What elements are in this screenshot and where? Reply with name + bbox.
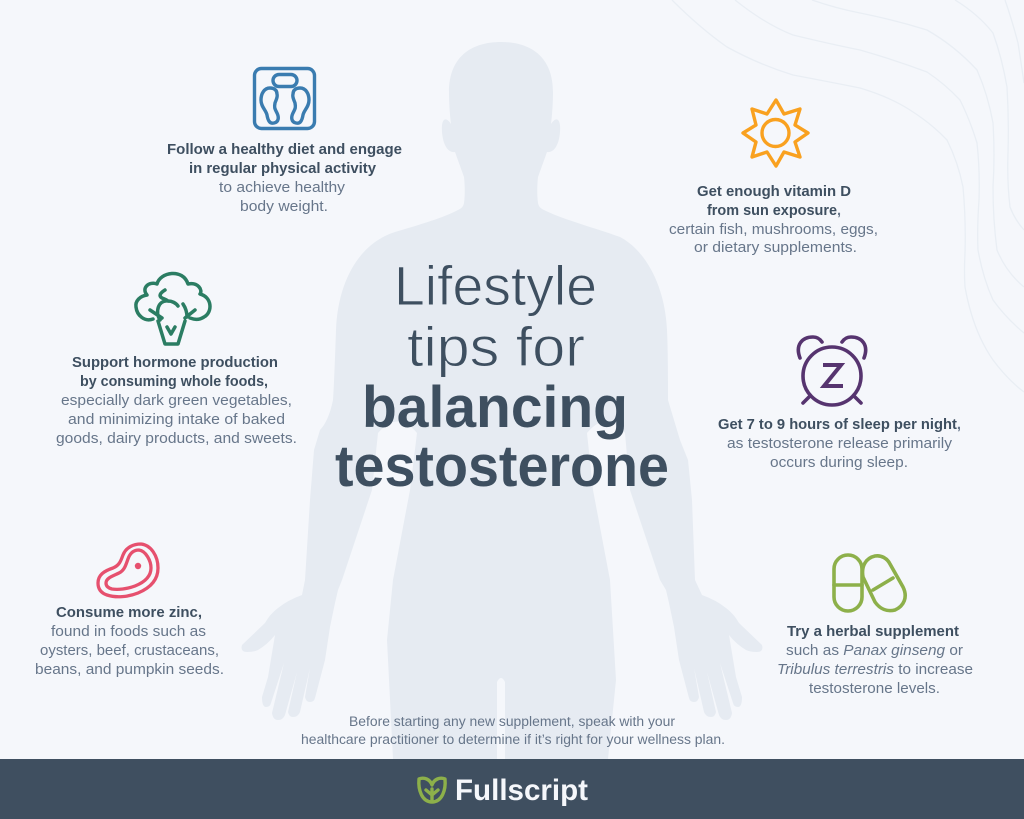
icon: meat steak: [98, 544, 158, 597]
disclaimer: healthcare practitioner to determine if it’s right for your wellness plan.: [301, 732, 725, 747]
text: sleep: as testosterone release primarily: [727, 436, 953, 452]
text: healthy body weight: Follow a healthy diet and engage: [167, 142, 402, 158]
text: vitamin D: Get enough vitamin D: [697, 184, 851, 200]
text: whole foods: especially dark green vegetables,: [61, 393, 292, 409]
icon: capsules: [834, 555, 905, 611]
title: balancing: [362, 375, 628, 440]
text: whole foods: [56, 355, 297, 447]
text: zinc: found in foods such as: [51, 624, 206, 640]
text: zinc: [35, 605, 224, 678]
title: Lifestyle: [394, 254, 597, 317]
title: [335, 254, 669, 499]
text: sleep: Get 7 to 9 hours of sleep per night ,: [718, 417, 961, 433]
text: whole foods: by consuming whole foods,: [80, 374, 268, 390]
footer bar: [0, 759, 1024, 819]
panel: zinc: [35, 544, 224, 678]
human body silhouette: [242, 42, 762, 759]
text: vitamin D: or dietary supplements.: [694, 240, 857, 256]
panel: herbal supplement: [777, 555, 973, 697]
icon: alarm clock: [798, 337, 866, 405]
text: healthy body weight: body weight.: [240, 199, 328, 215]
title: testosterone: [335, 434, 669, 499]
text: vitamin D: [669, 184, 878, 256]
text: healthy body weight: to achieve healthy: [219, 180, 346, 196]
text: vitamin D: from sun exposure,: [707, 203, 841, 219]
panel: sleep: [718, 337, 961, 471]
text: herbal supplement: Tribulus terrestris to increase: [777, 662, 973, 678]
icon: Fullscript leaf logo: [419, 778, 445, 802]
text: whole foods: goods, dairy products, and sweets.: [56, 431, 297, 447]
text: healthy body weight: [167, 142, 402, 215]
text: whole foods: Support hormone production: [72, 355, 278, 371]
title: tips for: [407, 315, 585, 378]
panel: whole foods: [56, 273, 297, 447]
text: sleep: [718, 417, 961, 471]
text: sleep: occurs during sleep.: [770, 455, 908, 471]
brand name: Fullscript: [455, 774, 588, 807]
text: zinc: Consume more zinc,: [56, 605, 202, 621]
text: healthy body weight: in regular physical activity: [189, 161, 376, 177]
disclaimer: Before starting any new supplement, speak with your: [349, 714, 676, 729]
text: whole foods: and minimizing intake of baked: [68, 412, 285, 428]
icon: sun: [743, 100, 808, 166]
text: vitamin D: certain fish, mushrooms, eggs,: [669, 222, 878, 238]
disclaimer: [301, 714, 725, 747]
panel: vitamin D: [669, 100, 878, 256]
text: zinc: beans, and pumpkin seeds.: [35, 662, 224, 678]
text: herbal supplement: Try a herbal supplement: [787, 624, 959, 640]
text: herbal supplement: such as Panax ginseng or: [786, 643, 963, 659]
text: herbal supplement: [777, 624, 973, 697]
icon: broccoli: [136, 273, 210, 344]
panel: healthy body weight: [167, 68, 402, 215]
text: herbal supplement: testosterone levels.: [809, 681, 940, 697]
icon: bathroom scale: [254, 68, 314, 128]
text: zinc: oysters, beef, crustaceans,: [40, 643, 219, 659]
